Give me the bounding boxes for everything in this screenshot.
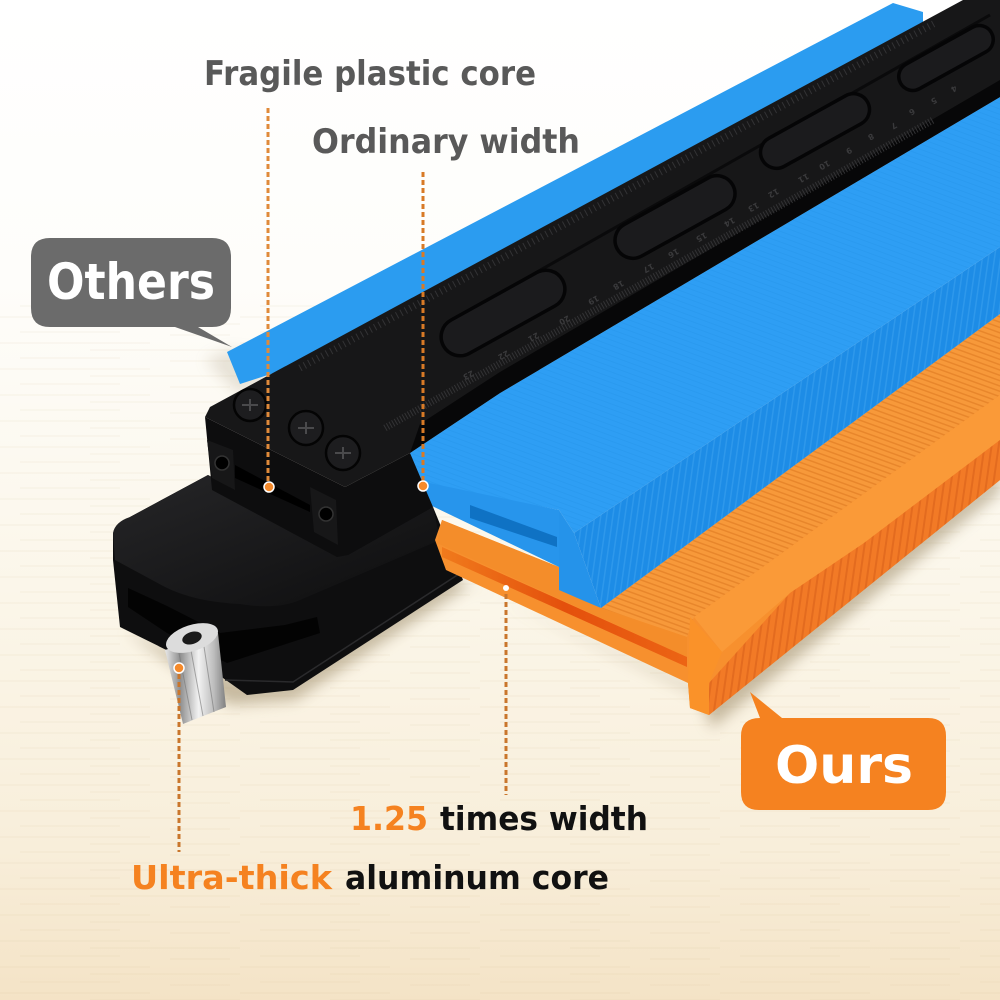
marker dot: ordinary width	[418, 481, 428, 491]
heading: fragile plastic core: Fragile plastic core	[204, 54, 536, 94]
callout line: fragile plastic core	[266, 108, 270, 483]
ruler ticks	[300, 15, 990, 428]
silver knob	[162, 617, 226, 724]
ruler numbers: 22	[496, 348, 510, 362]
product shadow	[125, 350, 1000, 728]
ruler slots	[434, 21, 998, 363]
ruler numbers: 6	[907, 106, 916, 117]
label: 1.25 times width: 1.25	[350, 799, 428, 838]
core end: screw blocks and slot	[207, 440, 338, 545]
ruler numbers: 14	[722, 215, 736, 229]
label: ultra-thick aluminum core: aluminum core	[345, 858, 609, 897]
orange gauge: ours	[435, 314, 1000, 715]
marker dot: 1.25 times width	[503, 585, 509, 591]
callout line: 1.25 times width	[504, 594, 508, 795]
ruler numbers: 7	[889, 120, 898, 131]
badge: ours: Ours	[775, 736, 913, 796]
ruler numbers: 12	[766, 186, 780, 200]
ruler numbers: 16	[666, 246, 680, 260]
marker dot: aluminum core	[174, 663, 184, 673]
ruler numbers	[461, 83, 958, 382]
ruler numbers: 13	[746, 200, 760, 214]
heading: ordinary width: Ordinary width	[312, 122, 580, 162]
ruler numbers: 18	[611, 278, 626, 292]
wood grain	[0, 300, 1000, 1000]
marker dot: plastic core	[264, 482, 274, 492]
black ruler core	[205, 0, 1000, 557]
ruler numbers: 19	[586, 293, 600, 307]
ruler numbers: 9	[844, 145, 854, 156]
ruler numbers: 10	[817, 158, 832, 172]
label: ultra-thick aluminum core	[131, 858, 609, 897]
black handle: lower block	[113, 475, 463, 695]
blue gauge: back edge	[227, 3, 923, 384]
screws	[234, 389, 360, 470]
badge: others	[31, 238, 232, 347]
ruler numbers: 15	[694, 230, 708, 244]
blue gauge: front, others	[410, 97, 1000, 608]
ruler numbers: 17	[641, 261, 656, 275]
ruler numbers: 11	[796, 171, 810, 185]
label: 1.25 times width: times width	[440, 799, 648, 838]
badge: ours	[741, 692, 946, 810]
ruler numbers: 20	[557, 313, 572, 327]
ruler numbers: 4	[949, 83, 958, 94]
ruler numbers: 23	[461, 368, 476, 382]
ruler numbers: 8	[866, 131, 876, 142]
callout line: aluminum core	[178, 674, 180, 852]
label: 1.25 times width	[350, 799, 648, 838]
ruler numbers: 5	[929, 95, 938, 106]
badge: others: Others	[47, 253, 215, 311]
callout line: ordinary width	[422, 172, 424, 482]
label: ultra-thick aluminum core: Ultra-thick	[131, 858, 333, 897]
ruler numbers: 21	[526, 330, 540, 344]
